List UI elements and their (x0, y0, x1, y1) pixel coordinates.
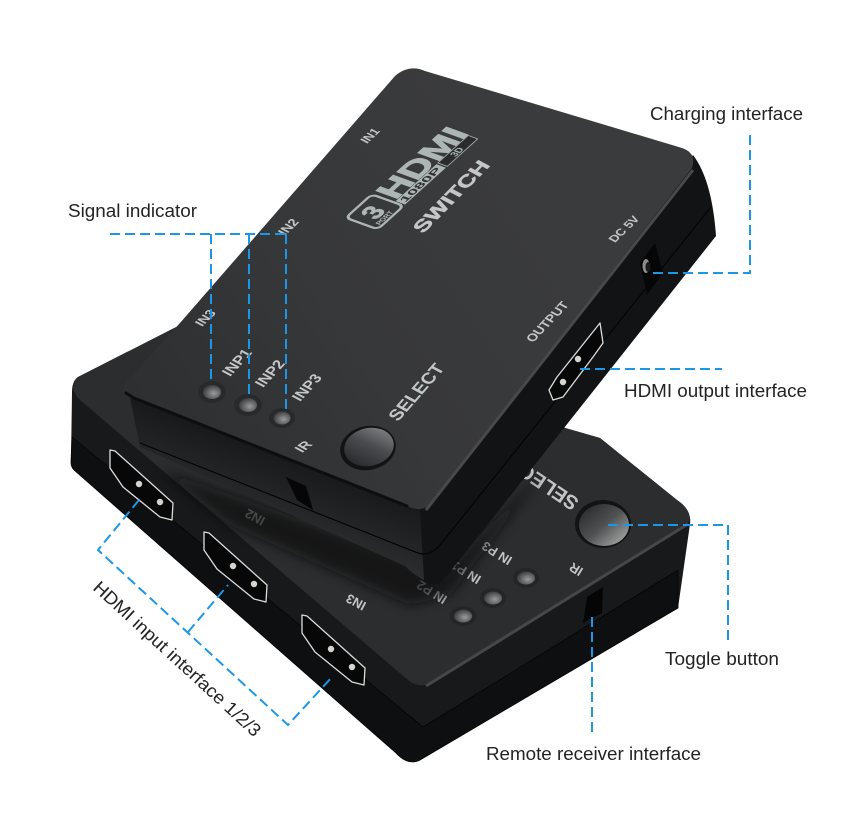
bottom device top face (73, 320, 690, 685)
charging interface caption: Charging interface (650, 104, 803, 124)
bottom HDMI port 3 (302, 615, 365, 685)
logo numeral 3: 3 (353, 202, 392, 222)
printed label IN2: IN2 (243, 506, 267, 529)
top device edge highlight (426, 170, 693, 510)
remote receiver caption: Remote receiver interface (486, 744, 701, 764)
bottom device lower side (71, 437, 678, 762)
charging interface leader line (650, 135, 750, 273)
HDMI output leader line (580, 368, 722, 370)
top select button (336, 421, 400, 475)
HDMI output port (549, 323, 603, 400)
signal indicator caption: Signal indicator (68, 201, 197, 221)
label IR: IR (291, 438, 316, 454)
HDMI input caption: HDMI input interface 1/2/3 (89, 577, 265, 741)
callout: HDMI input interface (89, 500, 332, 741)
logo 3D text: 3D (448, 146, 467, 158)
HDMI input leader lines (98, 500, 332, 725)
DC power jack (640, 243, 663, 295)
SWITCH label: SWITCH (409, 158, 495, 236)
bottom HDMI port 1 (110, 450, 173, 520)
label OUTPUT: OUTPUT (522, 299, 572, 344)
printed label SELECT: SELECT (505, 452, 583, 514)
top device cast shadow (160, 470, 545, 605)
label INP1: INP1 (219, 347, 256, 379)
remote receiver leader line (591, 617, 593, 736)
top switch device (124, 68, 716, 605)
label INP2: INP2 (252, 358, 289, 390)
logo 1080P band (396, 164, 446, 205)
toggle button caption: Toggle button (665, 649, 779, 669)
port count box (346, 194, 404, 229)
printed label IR: IR (566, 559, 586, 579)
logo HDMI wordmark: HDMI (367, 123, 476, 203)
top device seam (140, 207, 711, 554)
bottom toggle button (575, 500, 631, 548)
label DC 5V: DC 5V (605, 214, 643, 244)
printed label IN P1: IN P1 (448, 557, 484, 587)
top device top face (124, 68, 693, 509)
HDMI logo (339, 123, 481, 230)
HDMI output caption: HDMI output interface (624, 381, 807, 401)
label SELECT: SELECT (384, 360, 449, 424)
logo PORT label: PORT (375, 210, 396, 226)
top device right side (420, 155, 716, 584)
callout: signal indicator (68, 201, 286, 410)
top remote receiver window (286, 477, 313, 510)
top device left side (130, 398, 446, 582)
logo 3D band (438, 135, 478, 166)
bottom device body (71, 320, 690, 762)
bottom LED indicators (450, 568, 539, 626)
printed label IN3: IN3 (344, 591, 368, 614)
bottom switch device (71, 320, 690, 762)
callout: toggle button (608, 525, 779, 669)
callout: charging interface (650, 104, 803, 273)
bottom HDMI port 2 (204, 532, 267, 602)
signal indicator leader lines (110, 234, 286, 410)
label IN1: IN1 (357, 126, 383, 145)
top device edge groove (126, 393, 407, 506)
label INP3: INP3 (289, 372, 326, 404)
label IN2: IN2 (274, 216, 302, 237)
label IN3: IN3 (191, 307, 219, 328)
printed label IN P3: IN P3 (479, 538, 515, 568)
bottom remote receiver window (583, 587, 603, 623)
toggle button leader line (608, 525, 728, 642)
printed label IN P2: IN P2 (414, 577, 450, 607)
bottom device edge highlight (426, 524, 688, 686)
top LED indicators (198, 381, 295, 428)
logo 1080P text: 1080P (398, 166, 445, 204)
